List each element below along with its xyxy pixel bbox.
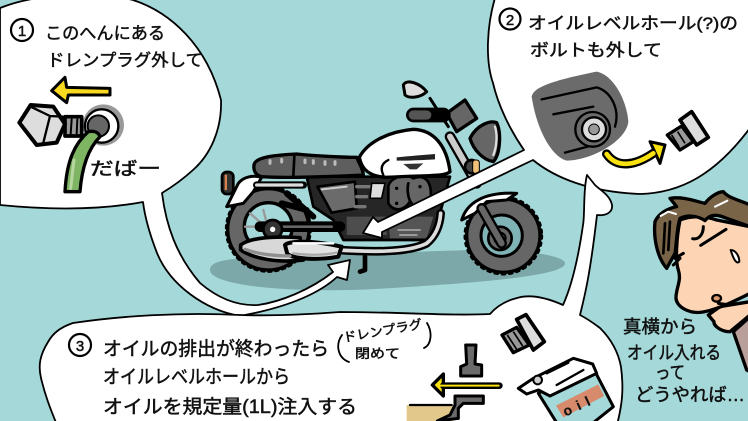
character: worried man bbox=[655, 192, 748, 372]
hair bbox=[655, 192, 748, 268]
step 3 text bbox=[103, 338, 357, 418]
side stand bbox=[360, 257, 365, 272]
ground shadow bbox=[210, 250, 565, 290]
icon: oil can bbox=[518, 358, 613, 421]
character's remark: どうやれば… bbox=[635, 385, 745, 405]
motorcycle bbox=[210, 82, 565, 290]
label: だばー: だばー bbox=[90, 159, 161, 179]
character's remark: って bbox=[655, 363, 685, 383]
step 3 text: オイルレベルホールから bbox=[103, 367, 290, 388]
rear wheel bbox=[226, 187, 310, 271]
fuel tank bbox=[359, 129, 450, 177]
icon: removed bolt bbox=[667, 112, 708, 150]
headlight and meter bbox=[447, 100, 500, 173]
panel: speech bubble 2 bbox=[363, 0, 748, 238]
step 1 text bbox=[45, 24, 203, 70]
step 2 number bbox=[500, 8, 520, 30]
character's remark bbox=[623, 317, 745, 405]
swingarm bbox=[260, 220, 340, 239]
exhaust pipe and muffler bbox=[241, 213, 441, 261]
frame and engine bbox=[307, 176, 450, 240]
icon: oil can: oil bbox=[560, 393, 593, 419]
step 2 text: オイルレベルホール(?)の bbox=[528, 14, 738, 33]
step 2 number: 2 bbox=[506, 12, 514, 29]
icon: yellow arrow into hole bbox=[432, 374, 499, 396]
icon: drain plug bolt and oil stream bbox=[19, 104, 124, 192]
icon: yellow arrow left bbox=[52, 77, 110, 103]
step 1 text: ドレンプラグ外して bbox=[47, 51, 203, 70]
icon: bolt bbox=[502, 315, 544, 353]
icon: yellow curved arrow bbox=[607, 142, 665, 164]
step 3 parenthetical note: ドレンプラグ bbox=[342, 317, 423, 345]
step 2 text bbox=[528, 14, 738, 60]
step 3 text: オイルの排出が終わったら bbox=[103, 338, 329, 360]
step 1 text: このへんにある bbox=[45, 24, 165, 43]
character's remark: オイル入れる bbox=[627, 343, 721, 363]
step 2 text: ボルトも外して bbox=[530, 41, 662, 60]
hand bbox=[708, 302, 748, 332]
panel: speech bubble 3 bbox=[40, 175, 622, 421]
step 3 text: オイルを規定量(1L)注入する bbox=[103, 396, 357, 418]
eyes, sweat and mouth bbox=[673, 227, 730, 305]
step 3 number: 3 bbox=[76, 338, 84, 355]
front fork and fender bbox=[450, 137, 517, 243]
panel: speech bubble 1 bbox=[0, 0, 350, 316]
step 3 parenthetical note: 閉めて bbox=[355, 346, 400, 361]
icon: oil filler hole diagram bbox=[407, 345, 483, 421]
icon: oil level hole bbox=[532, 72, 628, 161]
face bbox=[676, 217, 748, 312]
step 1 number: 1 bbox=[18, 23, 26, 40]
step 3 parenthetical note bbox=[338, 317, 431, 362]
rear fender and tail lamp bbox=[222, 172, 313, 217]
character's remark: 真横から bbox=[623, 317, 697, 337]
step 3 number bbox=[69, 334, 91, 356]
body bbox=[733, 317, 748, 372]
front wheel bbox=[465, 197, 542, 274]
step 1 number bbox=[11, 19, 33, 41]
seat bbox=[254, 154, 363, 177]
handlebar and mirror bbox=[403, 82, 448, 127]
